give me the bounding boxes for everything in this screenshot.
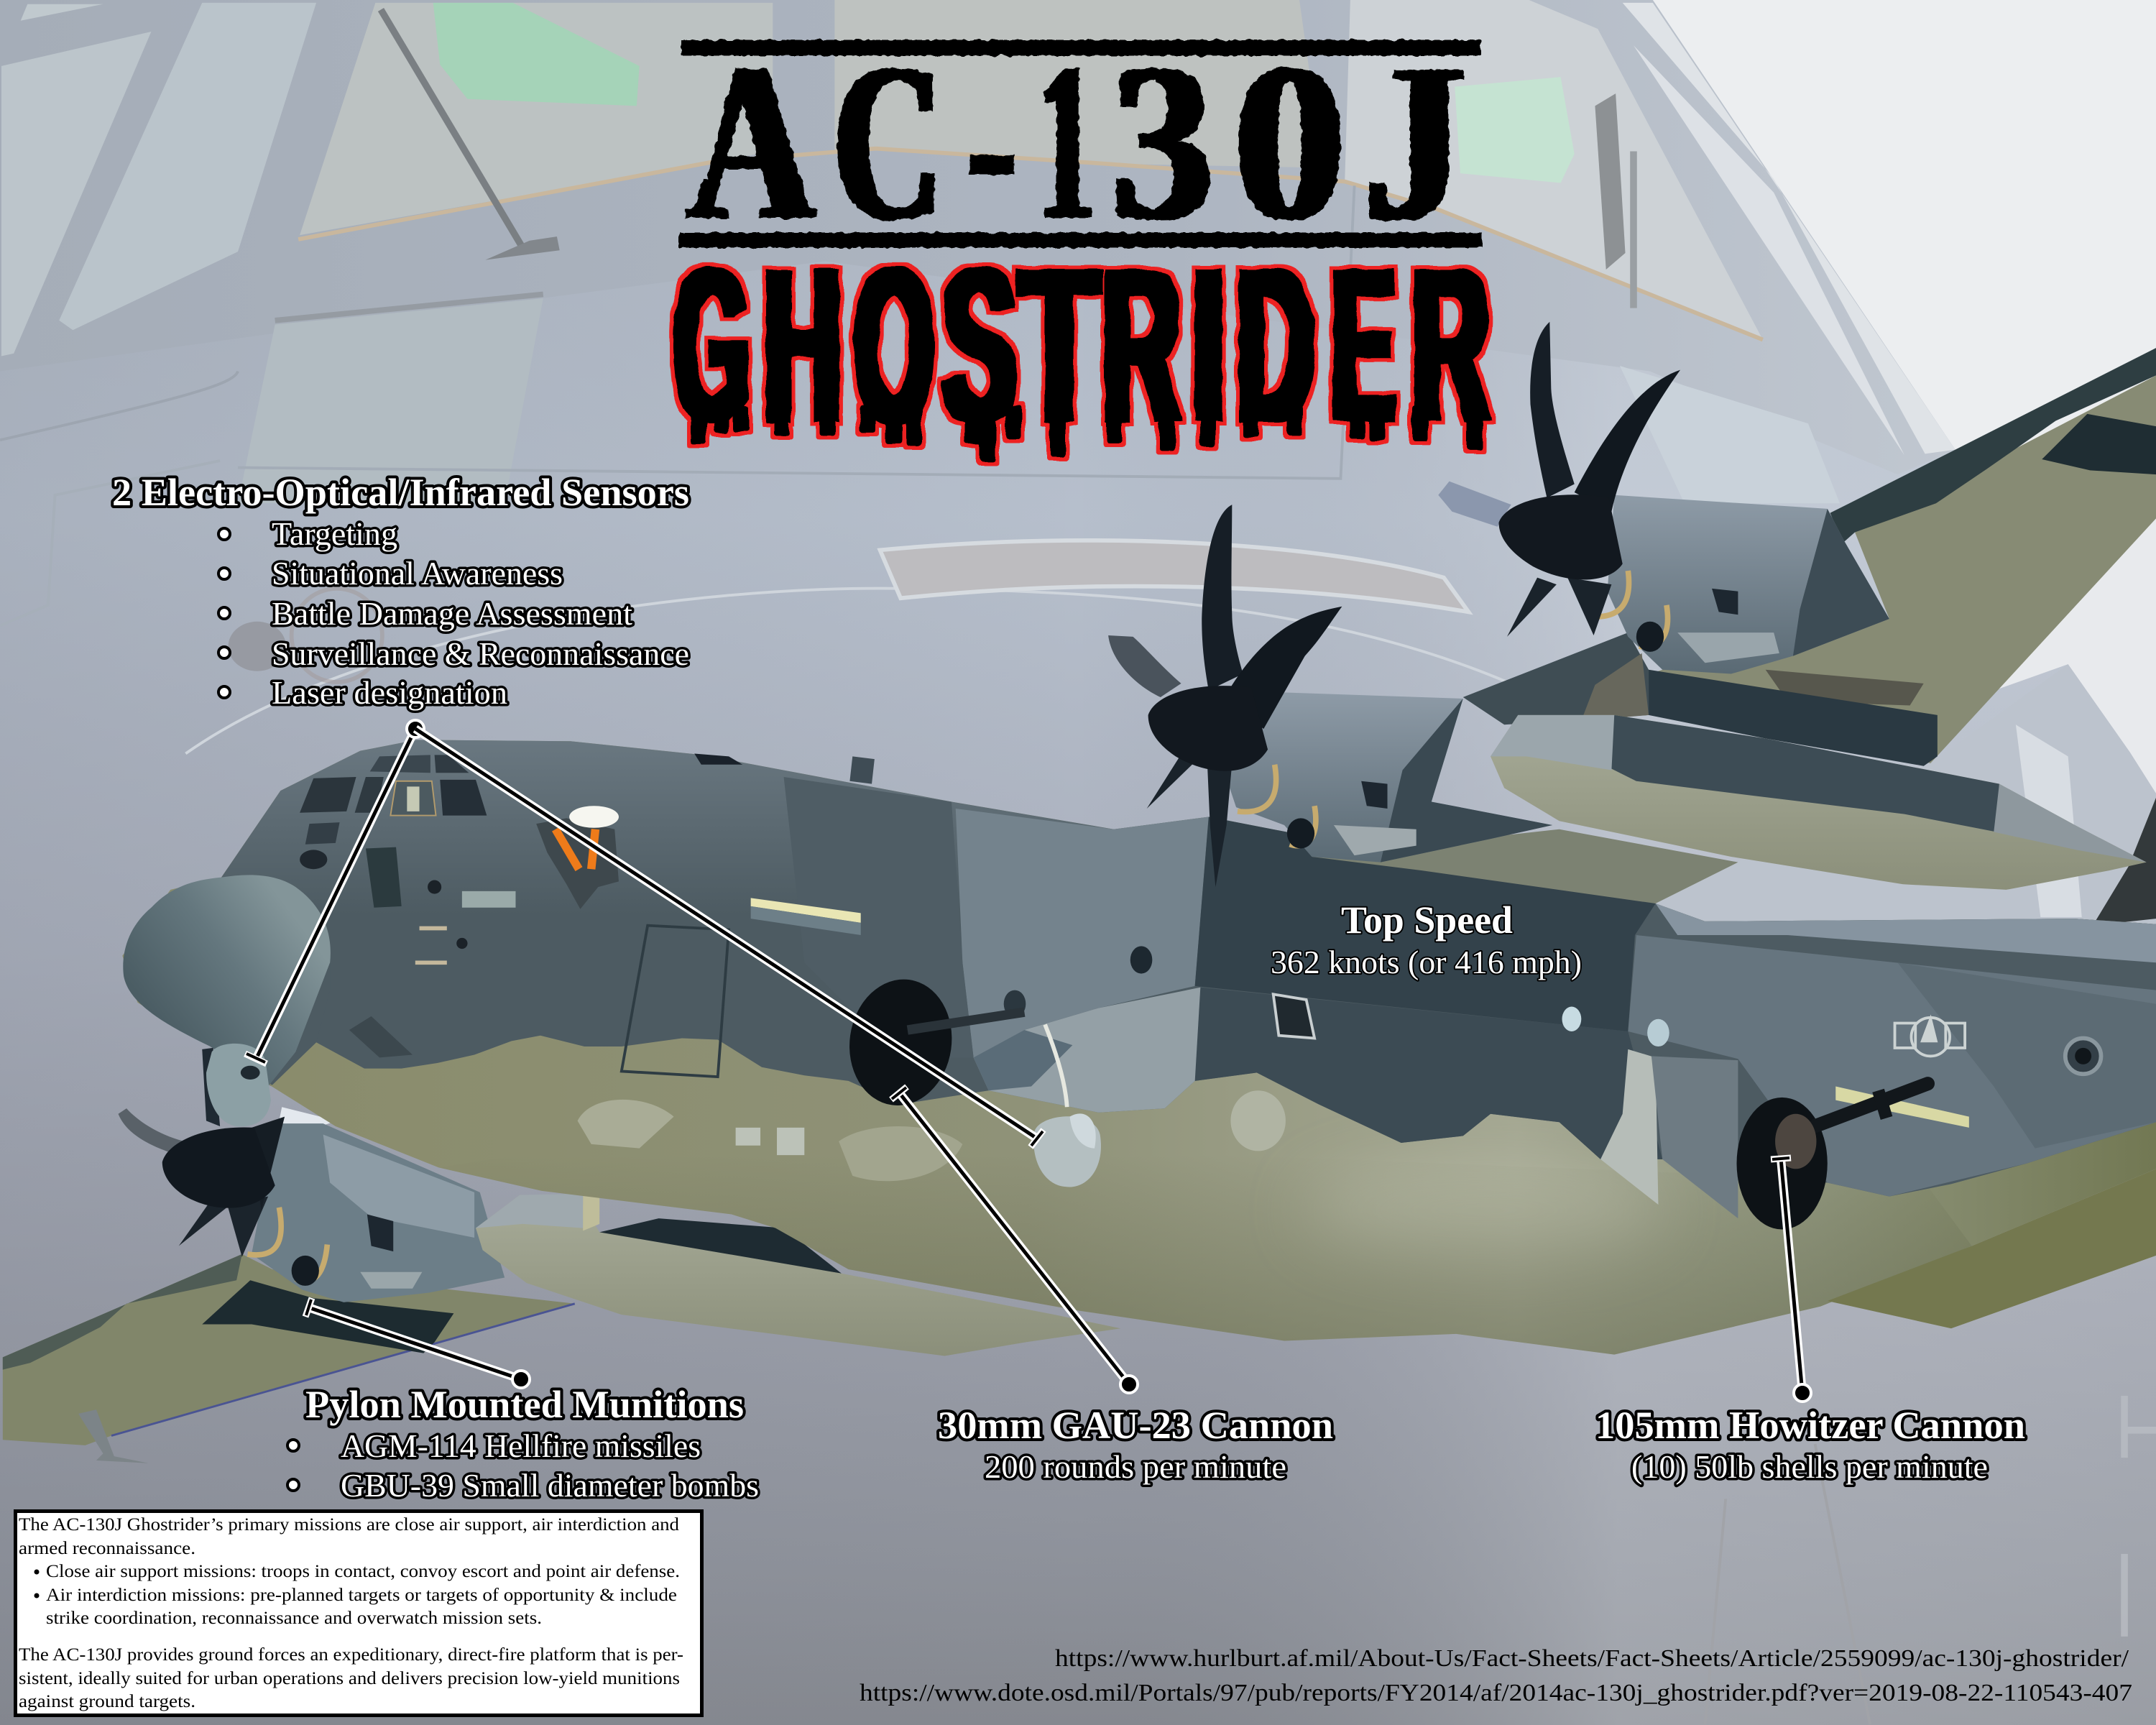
aircraft illustration [3, 322, 2156, 1463]
text block: howitzer: 105mm Howitzer Cannon [1595, 1404, 2025, 1447]
text block: howitzer [1595, 1404, 2025, 1485]
front sensor turret [202, 1044, 271, 1126]
text block: sensors: Battle Damage Assessment [272, 595, 632, 632]
nose radome [123, 875, 331, 1087]
title: GHOSTRIDER: H [764, 224, 842, 467]
panel: mission description: The AC-130J provides ground forces an expeditionary, direct-fire platform that is per- [19, 1645, 683, 1665]
title: GHOSTRIDER: I [1192, 224, 1225, 467]
sponson dark [1195, 988, 1662, 1159]
panel: mission description [16, 1511, 701, 1715]
title: AC-130J: 3 [1112, 17, 1213, 267]
cockpit windows [300, 755, 487, 908]
title: GHOSTRIDER: S [942, 224, 1016, 467]
105mm howitzer [1736, 1084, 1927, 1229]
sponson nose [974, 988, 1200, 1113]
text block: top speed: 362 knots (or 416 mph) [1271, 944, 1582, 980]
roundel [1895, 1018, 1965, 1056]
title: GHOSTRIDER: O [854, 224, 934, 467]
upper right wing [1312, 348, 2156, 903]
text block: top speed [1271, 898, 1582, 980]
text: R [1412, 224, 1489, 467]
fuselage [122, 740, 2156, 1355]
text block: sensors: 2 Electro-Optical/Infrared Sensors [112, 471, 689, 514]
panel: mission description: strike coordination, reconnaissance and overwatch mission sets. [46, 1609, 542, 1628]
title: AC-130J: - [968, 17, 1015, 267]
title: GHOSTRIDER [674, 224, 1489, 467]
text block: pylon munitions [287, 1383, 759, 1504]
mid grey section [956, 809, 1209, 1057]
upper camouflage [211, 740, 2156, 1197]
text block: sensors: Laser designation [272, 674, 507, 711]
inner engine and propeller [1108, 505, 1552, 887]
title: GHOSTRIDER: E [1332, 224, 1395, 467]
title: AC-130J: C [834, 17, 942, 267]
title: GHOSTRIDER: G [674, 224, 749, 467]
callout line: front sensor [245, 720, 424, 1064]
30mm cannon [842, 972, 1024, 1112]
nose frames [0, 0, 1955, 474]
tail fin base [2093, 798, 2156, 926]
callout line: side sensor [415, 729, 1044, 1147]
text block: sensors: Surveillance & Reconnaissance [272, 635, 689, 672]
source links [860, 1645, 2132, 1706]
title: GHOSTRIDER: D [1237, 224, 1314, 467]
source links: https://www.dote.osd.mil/Portals/97/pub/reports/FY2014/af/2014ac-130j_ghostrider.pdf?ver=2019-08-22-110543-407 [860, 1680, 2132, 1706]
rear ramp [1828, 1169, 2156, 1328]
callout line: howitzer [1771, 1158, 1811, 1402]
title: AC-130J: J [1364, 17, 1465, 267]
panel: mission description: sistent, ideally suited for urban operations and delivers precision low-yield munitions [19, 1669, 680, 1688]
title: AC-130J [678, 39, 1483, 249]
flame nose art [536, 806, 619, 909]
text block: howitzer: (10) 50lb shells per minute [1631, 1448, 1988, 1485]
fuselage details [349, 753, 2101, 1181]
title: AC-130J: 1 [1039, 17, 1093, 267]
left wing [3, 1254, 575, 1463]
text block: sensors: Targeting [272, 515, 397, 552]
panel: mission description: armed reconnaissance. [19, 1539, 195, 1558]
pylon mounted munitions [202, 1280, 453, 1353]
panel: mission description: Air interdiction missions: pre-planned targets or targets of opportunity & include [46, 1586, 677, 1605]
belly highlight [1307, 1164, 1664, 1257]
dark panel under wing [1195, 817, 1656, 1031]
fuel pod left [476, 1194, 1120, 1356]
text block: 30mm cannon: 30mm GAU-23 Cannon [938, 1404, 1333, 1447]
panel: mission description: Close air support missions: troops in contact, convoy escort and point air defense. [46, 1562, 680, 1581]
title: AC-130J: A [688, 17, 815, 267]
callout line: pylon munitions [305, 1298, 530, 1388]
source links: https://www.hurlburt.af.mil/About-Us/Fact-Sheets/Fact-Sheets/Article/2559099/ac-130j-ghostrider/ [1055, 1645, 2129, 1672]
text block: 30mm cannon: 200 rounds per minute [985, 1448, 1286, 1485]
pale fairing band [1600, 1049, 1658, 1205]
panel: mission description: The AC-130J Ghostrider’s primary missions are close air support, air interdiction and [19, 1515, 680, 1535]
callout line: 30mm cannon [891, 1087, 1138, 1393]
panel: mission description: against ground targets. [19, 1692, 195, 1711]
text block: sensors [112, 471, 689, 711]
title: GHOSTRIDER: T [1019, 224, 1100, 467]
title: AC-130J: 0 [1234, 17, 1345, 267]
text block: 30mm cannon [938, 1404, 1333, 1485]
text block: pylon munitions: AGM-114 Hellfire missiles [341, 1427, 701, 1464]
text block: top speed: Top Speed [1341, 898, 1513, 942]
upper right engine and propeller [1438, 322, 1889, 674]
text block: sensors: Situational Awareness [272, 555, 563, 592]
fuel pod right [1491, 715, 2147, 890]
title: GHOSTRIDER: R [1102, 224, 1180, 467]
text block: pylon munitions: Pylon Mounted Munitions [305, 1383, 744, 1426]
text block: pylon munitions: GBU-39 Small diameter bombs [341, 1467, 759, 1504]
left engine and propeller [119, 1107, 505, 1302]
belly shade [438, 1128, 1972, 1355]
side sensor turret [1033, 1113, 1101, 1187]
